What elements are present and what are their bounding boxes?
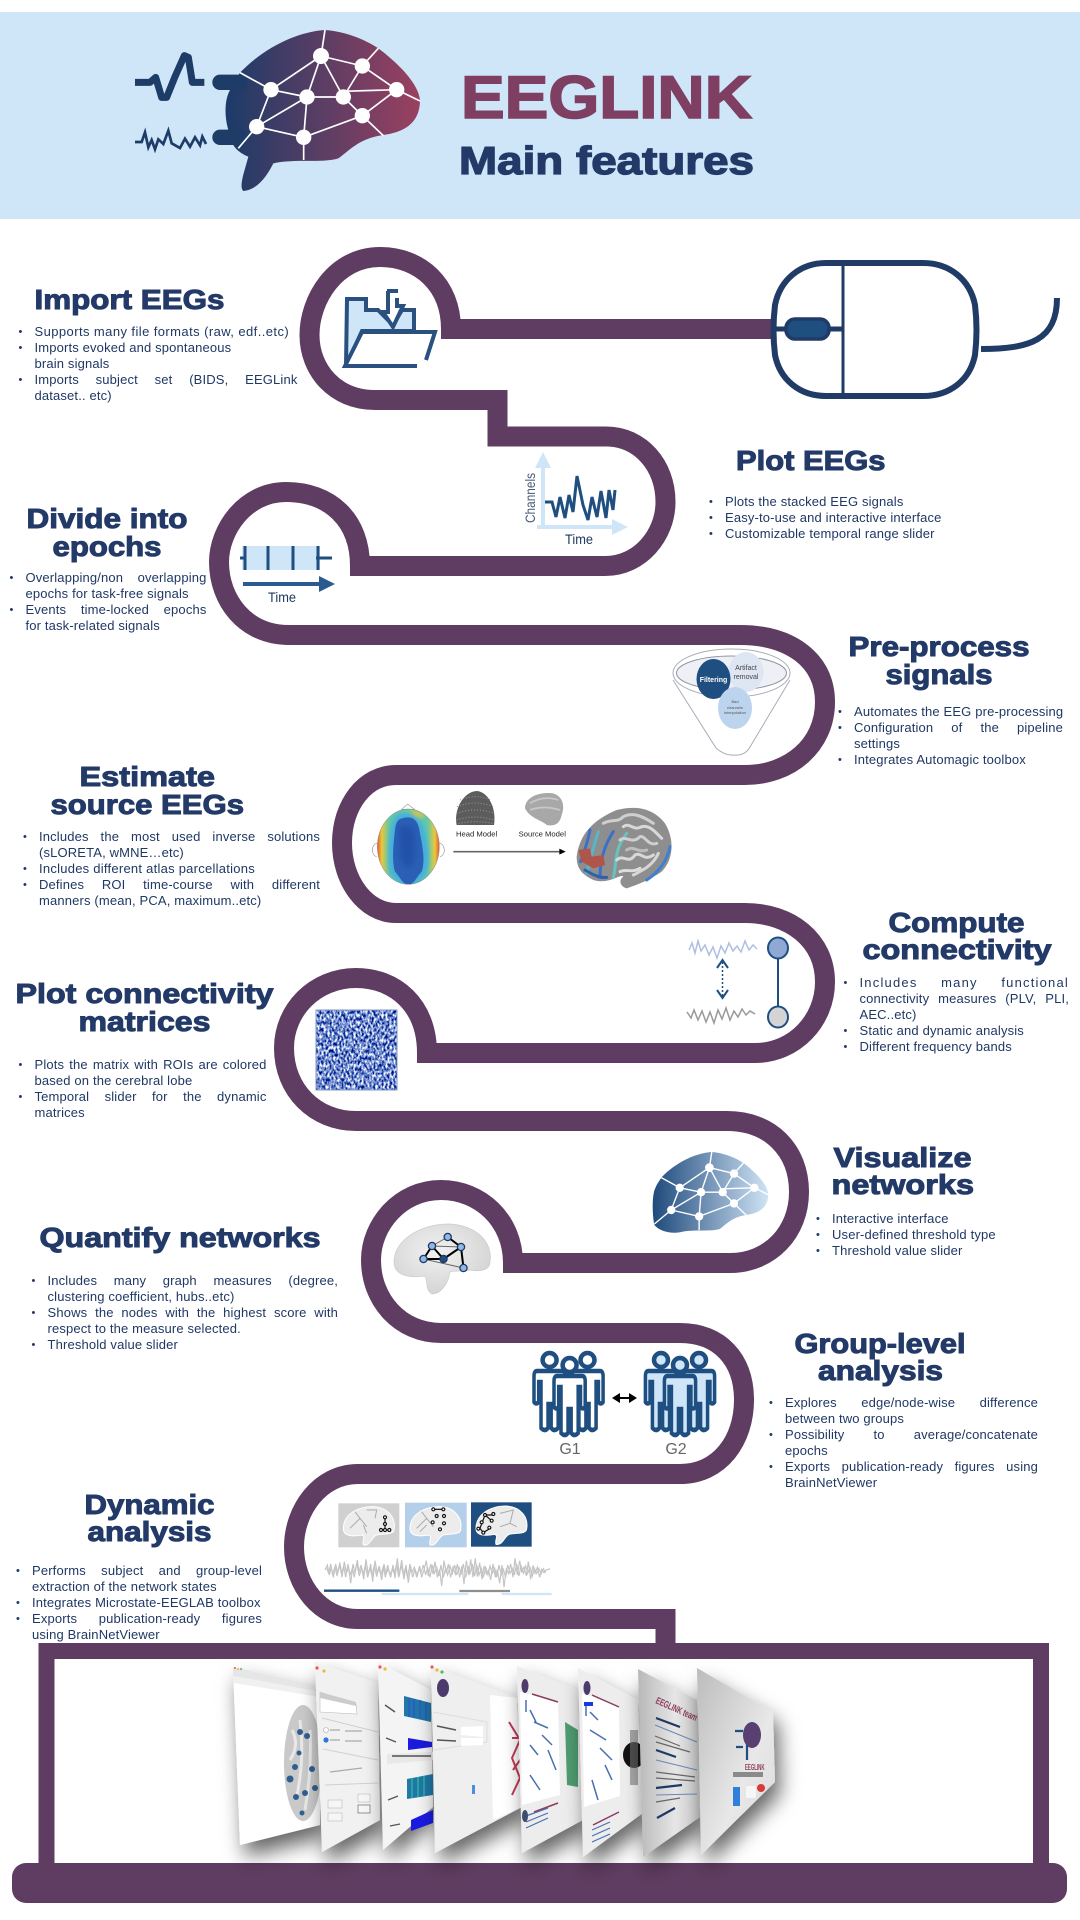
icon: network brain: [653, 1152, 768, 1233]
icon: epochs: [240, 546, 335, 605]
icon: source estimation: Source Model: [519, 830, 566, 839]
window 2: graph settings: [315, 1662, 380, 1852]
icon: group G2: [645, 1353, 715, 1435]
bullet list: Integrates Automagic toolbox: [854, 752, 1026, 767]
heading: Group-level: [794, 1328, 966, 1359]
bullet list: connectivity measures (PLV, PLI,: [860, 991, 1069, 1006]
icon: EEG plot: Channels: [522, 473, 538, 523]
bullet list: [812, 1211, 1052, 1259]
logo: EEG brain network: [135, 30, 420, 191]
icon: epochs: Time: [268, 589, 296, 605]
bullet list: Threshold value slider: [48, 1337, 178, 1352]
bullet list: for task-related signals: [26, 618, 160, 633]
bullet list: clustering coefficient, hubs..etc): [48, 1289, 234, 1304]
icon: connectivity matrix: [316, 1010, 397, 1090]
heading: [50, 761, 244, 820]
bullet list: Includes different atlas parcellations: [39, 861, 255, 876]
heading: [848, 631, 1030, 690]
serpentine path: [219, 257, 825, 1645]
icon: mouse: [773, 263, 1057, 396]
icon: source estimation: Head Model: [456, 830, 498, 839]
panel: Visualize networks: [812, 1142, 1052, 1259]
icon: EEG plot: [522, 452, 628, 547]
icon: graph on brain: [394, 1224, 490, 1294]
bullet list: Possibility to average/concatenate: [785, 1427, 1038, 1442]
bullet list: Explores edge/node-wise difference: [785, 1395, 1038, 1410]
window 7: team: EEGLINK team: [654, 1694, 699, 1723]
heading: source EEGs: [50, 789, 244, 820]
bullet list: [14, 324, 298, 404]
heading: analysis: [818, 1355, 943, 1386]
icon: pre-processing funnel: interpolation: [724, 710, 746, 715]
bullet list: [840, 975, 1069, 1055]
icon: source estimation: [372, 791, 672, 888]
bullet list: Configuration of the pipeline: [854, 720, 1063, 735]
icon: pre-processing funnel: channels: [727, 705, 743, 710]
arrow: between groups: [612, 1393, 637, 1403]
window 4: network viewer: [430, 1665, 522, 1853]
label: G2: G2: [665, 1441, 687, 1458]
bullet list: settings: [854, 736, 900, 751]
panel: Compute connectivity: [840, 907, 1069, 1055]
heading: Dynamic: [84, 1489, 214, 1520]
bullet list: User-defined threshold type: [832, 1227, 996, 1242]
bullet list: Events time-locked epochs: [26, 602, 206, 617]
bullet list: Customizable temporal range slider: [725, 526, 935, 541]
heading: Visualize: [834, 1142, 972, 1173]
bullet list: based on the cerebral lobe: [34, 1073, 192, 1088]
window 7: team: [638, 1669, 700, 1857]
icon: pre-processing funnel: [673, 649, 790, 755]
panel: Plot connectivity matrices: [14, 978, 274, 1121]
heading: [832, 1142, 974, 1200]
window 8: splash: [697, 1668, 775, 1855]
heading: Quantify networks: [40, 1222, 320, 1253]
heading: Import EEGs: [34, 284, 224, 315]
panel: Import EEGs: [14, 284, 298, 404]
header band: [0, 12, 1080, 219]
bullet list: Supports many file formats (raw, edf..etc): [34, 324, 289, 339]
heading: [26, 503, 188, 562]
bullet list: Includes many functional: [860, 975, 1069, 990]
icon: dynamic brain states: [324, 1502, 552, 1594]
window 1: brain network: [233, 1667, 322, 1845]
heading: Estimate: [80, 761, 215, 792]
bullet list: [834, 704, 1063, 768]
panel: Pre-process signals: [834, 631, 1063, 768]
panel: Group-level analysis: [765, 1328, 1038, 1491]
bullet list: Integrates Microstate-EEGLAB toolbox: [32, 1595, 261, 1610]
heading: Plot EEGs: [736, 445, 886, 476]
bullet list: Performs subject and group-level: [32, 1563, 262, 1578]
heading: signals: [886, 659, 992, 690]
heading: epochs: [52, 531, 162, 562]
icon: group G1: [534, 1353, 603, 1435]
bullet list: manners (mean, PCA, maximum..etc): [39, 893, 261, 908]
panel: Dynamic analysis: [12, 1489, 262, 1643]
bullet list: [14, 1057, 266, 1121]
bullet list: Includes many graph measures (degree,: [48, 1273, 338, 1288]
window 6: database signal: [578, 1668, 645, 1857]
heading: [862, 907, 1052, 965]
panel: Divide into epochs: [6, 503, 206, 634]
bullet list: epochs for task-free signals: [26, 586, 189, 601]
heading: Pre-process: [848, 631, 1030, 662]
bullet list: respect to the measure selected.: [48, 1321, 241, 1336]
heading: networks: [832, 1169, 974, 1200]
bullet list: using BrainNetViewer: [32, 1627, 160, 1642]
heading: [794, 1328, 966, 1386]
bullet list: [705, 494, 1005, 542]
heading: [16, 978, 274, 1037]
bullet list: Exports publication-ready figures using: [785, 1459, 1038, 1474]
bullet list: Includes the most used inverse solutions: [39, 829, 320, 844]
bullet list: BrainNetViewer: [785, 1475, 877, 1490]
heading: [84, 1489, 214, 1547]
bullet list: (sLORETA, wMNE…etc): [39, 845, 184, 860]
window 3: dynamic states: [378, 1662, 433, 1850]
bullet list: [765, 1395, 1038, 1491]
icon: pre-processing funnel: Filtering: [700, 677, 727, 684]
subtitle: Main features: [459, 140, 754, 183]
window 5: database matrix: [517, 1666, 583, 1853]
bullet list: Easy-to-use and interactive interface: [725, 510, 942, 525]
bullet list: [12, 1563, 262, 1643]
bullet list: Different frequency bands: [860, 1039, 1012, 1054]
icon: pre-processing funnel: removal: [734, 674, 759, 681]
icon: pre-processing funnel: Artifact: [735, 665, 757, 672]
bullet list: Interactive interface: [832, 1211, 949, 1226]
bullet list: Imports subject set (BIDS, EEGLink: [34, 372, 298, 387]
heading: connectivity: [862, 934, 1052, 965]
heading: matrices: [78, 1006, 210, 1037]
window 8: splash: EEGLINK: [745, 1764, 765, 1772]
bullet list: dataset.. etc): [34, 388, 112, 403]
bullet list: Automates the EEG pre-processing: [854, 704, 1063, 719]
panel: Quantify networks: [28, 1222, 338, 1353]
bullet list: brain signals: [34, 356, 109, 371]
panel: Plot EEGs: [705, 445, 1005, 542]
bullet list: [6, 570, 206, 634]
heading: Divide into: [26, 503, 188, 534]
bullet list: Plots the matrix with ROIs are colored: [34, 1057, 266, 1072]
icon: connectivity: [687, 938, 788, 1028]
bullet list: Overlapping/non overlapping: [26, 570, 206, 585]
bullet list: epochs: [785, 1443, 828, 1458]
bullet list: matrices: [34, 1105, 85, 1120]
bullet list: [28, 1273, 338, 1353]
bullet list: extraction of the network states: [32, 1579, 217, 1594]
bullet list: AEC..etc): [860, 1007, 916, 1022]
heading: analysis: [88, 1516, 212, 1547]
bullet list: Static and dynamic analysis: [860, 1023, 1024, 1038]
title: EEGLINK: [461, 64, 752, 131]
bullet list: Plots the stacked EEG signals: [725, 494, 904, 509]
bullet list: Exports publication-ready figures: [32, 1611, 262, 1626]
panel: Estimate source EEGs: [19, 761, 320, 909]
icon: EEG plot: Time: [565, 531, 593, 547]
bullet list: between two groups: [785, 1411, 904, 1426]
bullet list: Defines ROI time-course with different: [39, 877, 320, 892]
icon: pre-processing funnel: Bad: [731, 699, 739, 704]
screenshots fan: [233, 1662, 775, 1857]
laptop frame: [12, 1651, 1067, 1903]
bullet list: Threshold value slider: [832, 1243, 962, 1258]
heading: Compute: [888, 907, 1024, 938]
heading: Plot connectivity: [16, 978, 274, 1009]
icon: folder import: [345, 291, 435, 366]
bullet list: Temporal slider for the dynamic: [34, 1089, 266, 1104]
bullet list: [19, 829, 320, 909]
label: G1: G1: [559, 1441, 581, 1458]
bullet list: Shows the nodes with the highest score with: [48, 1305, 338, 1320]
bullet list: Imports evoked and spontaneous: [34, 340, 231, 355]
